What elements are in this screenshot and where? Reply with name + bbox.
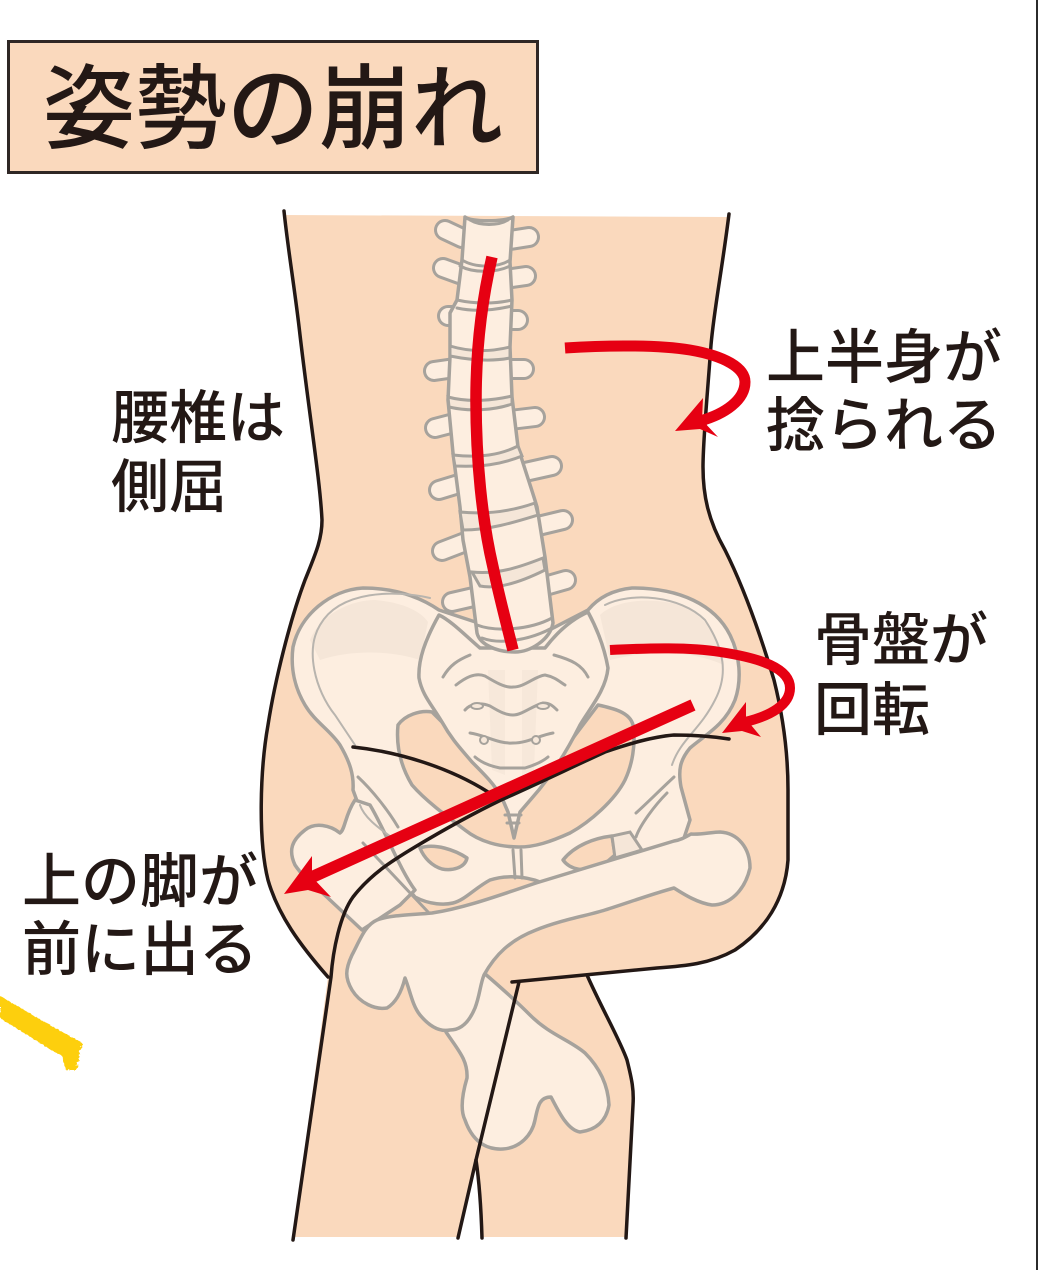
label: lumbar lateral flexion: 腰椎は bbox=[111, 386, 285, 451]
text: 回転 bbox=[814, 678, 930, 743]
lower femur shaft bbox=[446, 973, 609, 1149]
iliac crest inner lines bbox=[313, 594, 430, 745]
hip socket lines bbox=[358, 777, 674, 837]
text: 側屈 bbox=[111, 455, 227, 520]
sacrum shading bands bbox=[488, 670, 538, 775]
arrow: upper body twist bbox=[565, 346, 745, 437]
red spine curve bbox=[476, 257, 513, 650]
body illustration bbox=[261, 211, 790, 1240]
sacral ridges bbox=[443, 655, 588, 823]
lower pelvic crest visible between bones bbox=[480, 883, 585, 918]
pelvis bbox=[292, 588, 739, 918]
title box: 姿勢の崩れ bbox=[43, 59, 503, 161]
intervertebral discs bbox=[448, 220, 552, 641]
page edge line bbox=[1036, 0, 1038, 1270]
iliac wing shading bbox=[310, 600, 428, 660]
lumbar transverse processes bbox=[434, 230, 566, 602]
upper femur with head bbox=[347, 832, 750, 1030]
label: pelvis rotation: 骨盤が bbox=[814, 608, 988, 673]
text: 捻られる bbox=[766, 393, 1002, 459]
pelvic opening bbox=[398, 705, 634, 847]
obturator foramen right bbox=[563, 836, 615, 870]
yellow crayon mark bbox=[0, 996, 82, 1070]
label: upper body twisted: 上半身が bbox=[766, 325, 1002, 391]
sacrum bbox=[419, 612, 608, 838]
lumbar spine column bbox=[448, 217, 553, 652]
pelvis bone mass bbox=[292, 588, 739, 904]
text: 前に出る bbox=[22, 917, 258, 983]
body skin silhouette bbox=[261, 215, 788, 1237]
obturator foramen left bbox=[420, 846, 467, 870]
title box bbox=[8, 42, 538, 172]
pubic symphysis bbox=[513, 850, 522, 878]
left femur (background leg) bbox=[292, 800, 429, 930]
label: upper leg forward: 上の脚が bbox=[22, 849, 258, 915]
body outline strokes bbox=[261, 211, 788, 1240]
arrow: upper leg forward bbox=[284, 705, 693, 897]
arrow: pelvis rotation bbox=[610, 648, 790, 737]
